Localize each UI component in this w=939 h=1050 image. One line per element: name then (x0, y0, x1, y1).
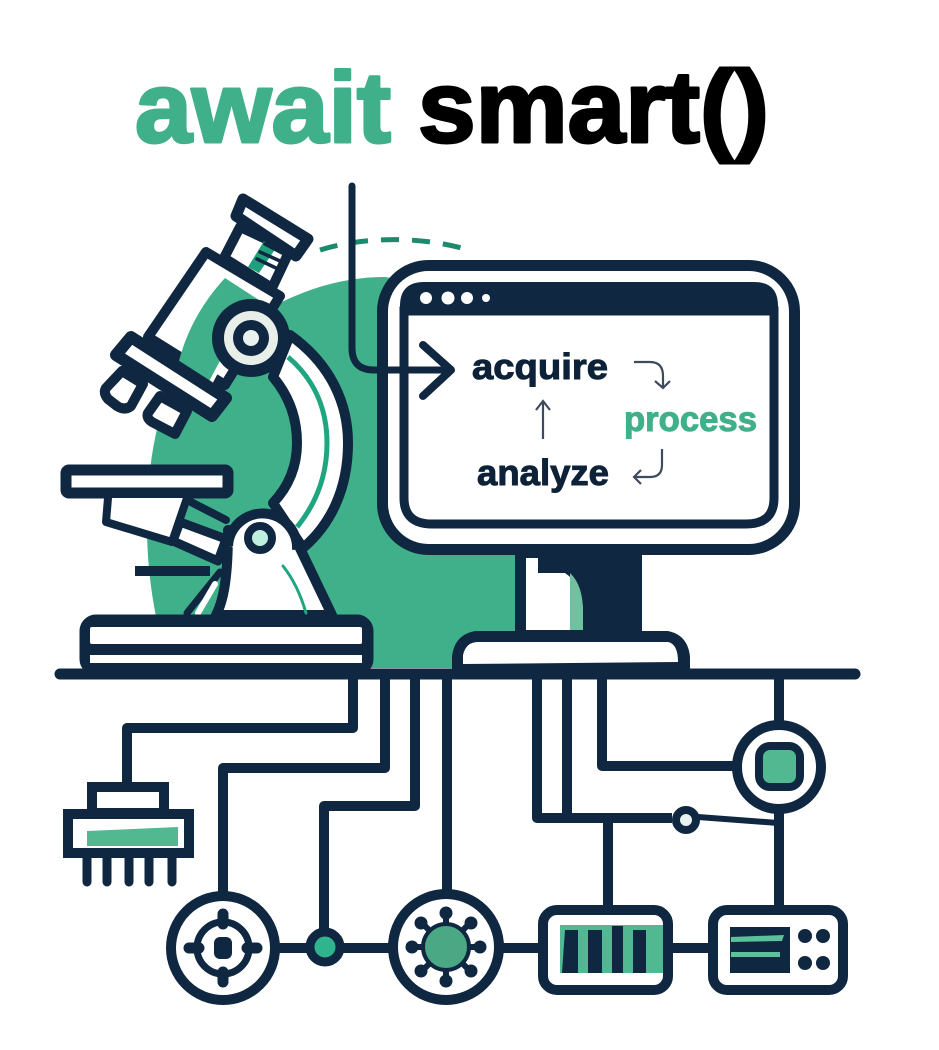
icon: junction node (310, 932, 340, 962)
monitor outer frame (382, 266, 794, 550)
monitor screen (400, 282, 778, 524)
lower knob (228, 509, 297, 567)
microscope collar (116, 337, 226, 416)
icon: virus circle (393, 894, 499, 1000)
icon: chip connector (68, 787, 189, 882)
icon: small junction (676, 810, 696, 830)
microscope foot (187, 530, 332, 615)
title: smart() (418, 50, 769, 164)
stage holder (106, 498, 226, 561)
label: process: process (624, 400, 757, 439)
microscope base (84, 619, 369, 671)
microscope (66, 199, 369, 671)
icon: display box (713, 910, 843, 990)
label: analyze: analyze (477, 452, 609, 493)
icon: barcode box (543, 910, 668, 990)
icon: target circle (171, 896, 275, 1000)
microscope arm (273, 335, 348, 548)
monitor stand (515, 550, 642, 635)
microscope focus bar (135, 566, 210, 576)
microscope tube (148, 252, 280, 385)
arrow: analyze to acquire (536, 401, 550, 439)
icon: square sensor circle (737, 725, 821, 809)
monitor stand base (452, 631, 690, 672)
arrow into screen (352, 186, 451, 396)
green background blob (147, 277, 520, 668)
upper knob (212, 299, 290, 377)
curved arrow: process to analyze (634, 449, 662, 484)
title: await (135, 52, 391, 164)
circuit wiring (127, 678, 779, 948)
title (135, 50, 769, 164)
microscope objective lenses (105, 371, 187, 434)
microscope eyepiece (224, 199, 308, 288)
monitor (382, 266, 794, 672)
dashed arc (320, 240, 472, 251)
curved arrow: acquire to process (634, 362, 670, 388)
microscope stage (66, 470, 228, 493)
label: acquire: acquire (472, 346, 608, 387)
window control dots (420, 292, 490, 304)
table line (60, 668, 855, 680)
